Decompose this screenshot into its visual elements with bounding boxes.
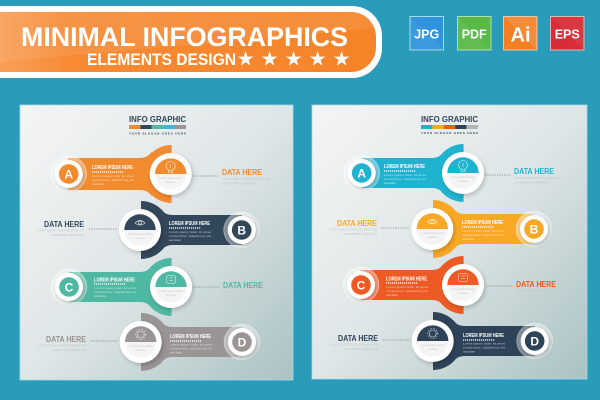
banner subheading: ELEMENTS DESIGN [87, 50, 236, 69]
C data label: DATA HERE [223, 280, 263, 290]
A text: Lorem ipsum dolor sit amet [92, 174, 134, 178]
B data label [36, 219, 84, 237]
B icon circle [119, 209, 161, 251]
C letter badge [343, 267, 379, 303]
badge: JPG [410, 16, 444, 50]
C data label [223, 280, 271, 298]
format badges [410, 16, 584, 50]
panel heading [129, 115, 186, 136]
B text: consectetur adipiscing elit [462, 233, 504, 237]
A data label [514, 166, 562, 184]
C data label: consectetur adipiscing [516, 294, 550, 298]
icon: eye [427, 220, 437, 224]
D text [463, 333, 505, 354]
row B [36, 201, 260, 259]
D text: sed diam [170, 350, 183, 354]
C icon circle: sit amet [166, 293, 176, 297]
A text [384, 164, 426, 185]
D icon circle: sit amet [136, 348, 146, 352]
icon: light bulb [166, 162, 175, 172]
C icon circle: sit amet [458, 291, 468, 295]
A text: sed diam [92, 182, 105, 186]
icon: light bulb [458, 160, 468, 172]
C letter badge [51, 269, 87, 305]
D data label [330, 333, 378, 351]
C text: Lorem ipsum dolor sit amet [94, 286, 136, 290]
D data label: Lorem ipsum dolor sit amet elit [38, 344, 86, 348]
panel heading [421, 115, 478, 135]
B data label [329, 218, 377, 236]
five star rating: ★★★★★ [237, 46, 351, 70]
C text: Lorem ipsum dolor sit amet [386, 285, 428, 289]
B data label: DATA HERE [44, 219, 84, 229]
C icon circle: Lorem ipsum dolor [451, 287, 475, 291]
A text: consectetur adipiscing elit [92, 178, 134, 182]
A text: Lorem ipsum dolor sit amet [384, 173, 426, 177]
D data label: DATA HERE [46, 334, 86, 344]
C text: LOREM IPSUM HERE [94, 278, 136, 284]
panel: right infographic [312, 105, 587, 379]
icon: chat [166, 276, 176, 284]
D data label [38, 334, 86, 352]
row D [38, 313, 260, 371]
badge: PDF: PDF [462, 28, 487, 42]
D leader [91, 340, 118, 342]
badge: Ai: Ai [510, 24, 530, 46]
A data label: consectetur adipiscing [514, 180, 548, 184]
B data label: consectetur adipiscing [50, 233, 84, 237]
C letter badge: C [65, 280, 74, 294]
D icon circle: Lorem ipsum dolor [129, 344, 152, 348]
C icon circle [442, 264, 484, 306]
B data label: Lorem ipsum dolor sit amet elit [329, 228, 377, 232]
B data label: DATA HERE [337, 218, 377, 228]
A text: sed diam [384, 181, 397, 185]
D letter badge: D [238, 336, 247, 350]
B leader [381, 227, 409, 229]
row B [329, 200, 552, 258]
B icon circle: Lorem ipsum dolor [128, 232, 152, 236]
A text: LOREM IPSUM HERE [384, 164, 426, 170]
B icon circle: sit amet [427, 235, 437, 239]
B text: LOREM IPSUM HERE [169, 221, 211, 227]
A data label: Lorem ipsum dolor sit amet elit [222, 177, 270, 181]
B data label: consectetur adipiscing [343, 232, 377, 236]
C data label: Lorem ipsum dolor sit amet elit [516, 289, 564, 293]
D text: consectetur adipiscing elit [463, 346, 505, 350]
D icon circle: Lorem ipsum dolor [421, 343, 444, 347]
A data label: DATA HERE [222, 167, 262, 177]
A icon circle: Lorem ipsum dolor [451, 175, 475, 179]
row C [343, 256, 564, 314]
B data label: Lorem ipsum dolor sit amet elit [36, 228, 84, 232]
A text: consectetur adipiscing elit [384, 177, 426, 181]
badge: EPS: EPS [555, 28, 580, 42]
panel heading: YOUR SLOGAN GOES HERE [421, 131, 478, 135]
C icon circle: Lorem ipsum dolor [159, 289, 183, 293]
B text: LOREM IPSUM HERE [462, 220, 504, 226]
D text: sed diam [463, 350, 476, 354]
D leader [383, 339, 410, 341]
A data label [222, 167, 270, 186]
C leader [486, 285, 513, 287]
A data label: consectetur adipiscing [222, 182, 256, 186]
badge: PDF [458, 16, 491, 50]
A text [92, 165, 134, 186]
A leader [193, 175, 219, 177]
panel: left infographic [20, 105, 293, 380]
row A [344, 144, 562, 202]
C text: consectetur adipiscing elit [94, 290, 136, 294]
A icon circle [150, 153, 192, 195]
D data label: consectetur adipiscing [344, 347, 378, 351]
D text: consectetur adipiscing elit [170, 346, 212, 350]
D icon circle: sit amet [428, 347, 438, 351]
B text: Lorem ipsum dolor sit amet [169, 230, 211, 234]
A icon circle: sit amet [166, 180, 176, 184]
B text: sed diam [462, 237, 475, 241]
icon: gear [428, 328, 438, 338]
B icon circle [411, 208, 453, 250]
badge: JPG: JPG [414, 28, 439, 42]
C letter badge: C [357, 278, 366, 292]
A icon circle [442, 152, 484, 194]
B letter badge: B [237, 224, 246, 238]
C data label [516, 279, 564, 298]
badge: Ai [504, 16, 537, 50]
D text: LOREM IPSUM HERE [463, 333, 505, 339]
C text: sed diam [386, 293, 399, 297]
A text: LOREM IPSUM HERE [92, 165, 134, 171]
D text: Lorem ipsum dolor sit amet [170, 342, 212, 346]
banner heading: MINIMAL INFOGRAPHICS [21, 22, 348, 52]
panel heading: INFO GRAPHIC [421, 115, 478, 124]
B text: Lorem ipsum dolor sit amet [462, 229, 504, 233]
icon: eye [135, 220, 145, 225]
D text: LOREM IPSUM HERE [170, 334, 212, 340]
C text [94, 278, 136, 298]
panel heading: YOUR SLOGAN GOES HERE [129, 132, 186, 136]
C data label: consectetur adipiscing [223, 294, 257, 298]
B icon circle: Lorem ipsum dolor [421, 231, 444, 235]
C text [386, 276, 428, 297]
row C [51, 258, 271, 316]
title banner [0, 6, 382, 78]
B text: sed diam [169, 238, 182, 242]
A letter badge [51, 156, 87, 192]
A letter badge: A [357, 166, 366, 180]
D icon circle [412, 320, 454, 362]
A icon circle: sit amet [458, 179, 468, 183]
C text: consectetur adipiscing elit [386, 289, 428, 293]
B text: consectetur adipiscing elit [169, 234, 211, 238]
A data label: DATA HERE [514, 166, 554, 176]
B leader [89, 228, 117, 230]
row A [51, 145, 270, 203]
badge: EPS [550, 16, 584, 50]
panel heading: INFO GRAPHIC [129, 115, 186, 124]
C text: sed diam [94, 294, 107, 298]
C text: LOREM IPSUM HERE [386, 276, 428, 282]
B text [169, 221, 211, 242]
D text [170, 334, 212, 354]
C data label: DATA HERE [516, 279, 556, 289]
B text [462, 220, 504, 241]
D data label: DATA HERE [338, 333, 378, 343]
C data label: Lorem ipsum dolor sit amet elit [223, 290, 271, 294]
D letter badge: D [530, 334, 539, 348]
D letter badge [224, 324, 260, 360]
A data label: Lorem ipsum dolor sit amet elit [514, 176, 562, 180]
A letter badge [344, 155, 380, 191]
icon: chat [458, 274, 468, 282]
A leader [485, 174, 511, 176]
A icon circle: Lorem ipsum dolor [159, 176, 182, 180]
icon: gear [136, 330, 146, 340]
B icon circle: sit amet [135, 236, 145, 240]
B letter badge [224, 212, 260, 248]
C leader [194, 286, 220, 288]
D text: Lorem ipsum dolor sit amet [463, 342, 505, 346]
row D [330, 312, 553, 370]
D data label: Lorem ipsum dolor sit amet elit [330, 342, 378, 346]
B letter badge [516, 211, 552, 247]
D letter badge [517, 323, 553, 359]
B letter badge: B [530, 222, 539, 236]
A letter badge: A [64, 168, 73, 182]
D icon circle [120, 321, 162, 363]
D data label: consectetur adipiscing [52, 348, 86, 352]
C icon circle [150, 266, 192, 308]
